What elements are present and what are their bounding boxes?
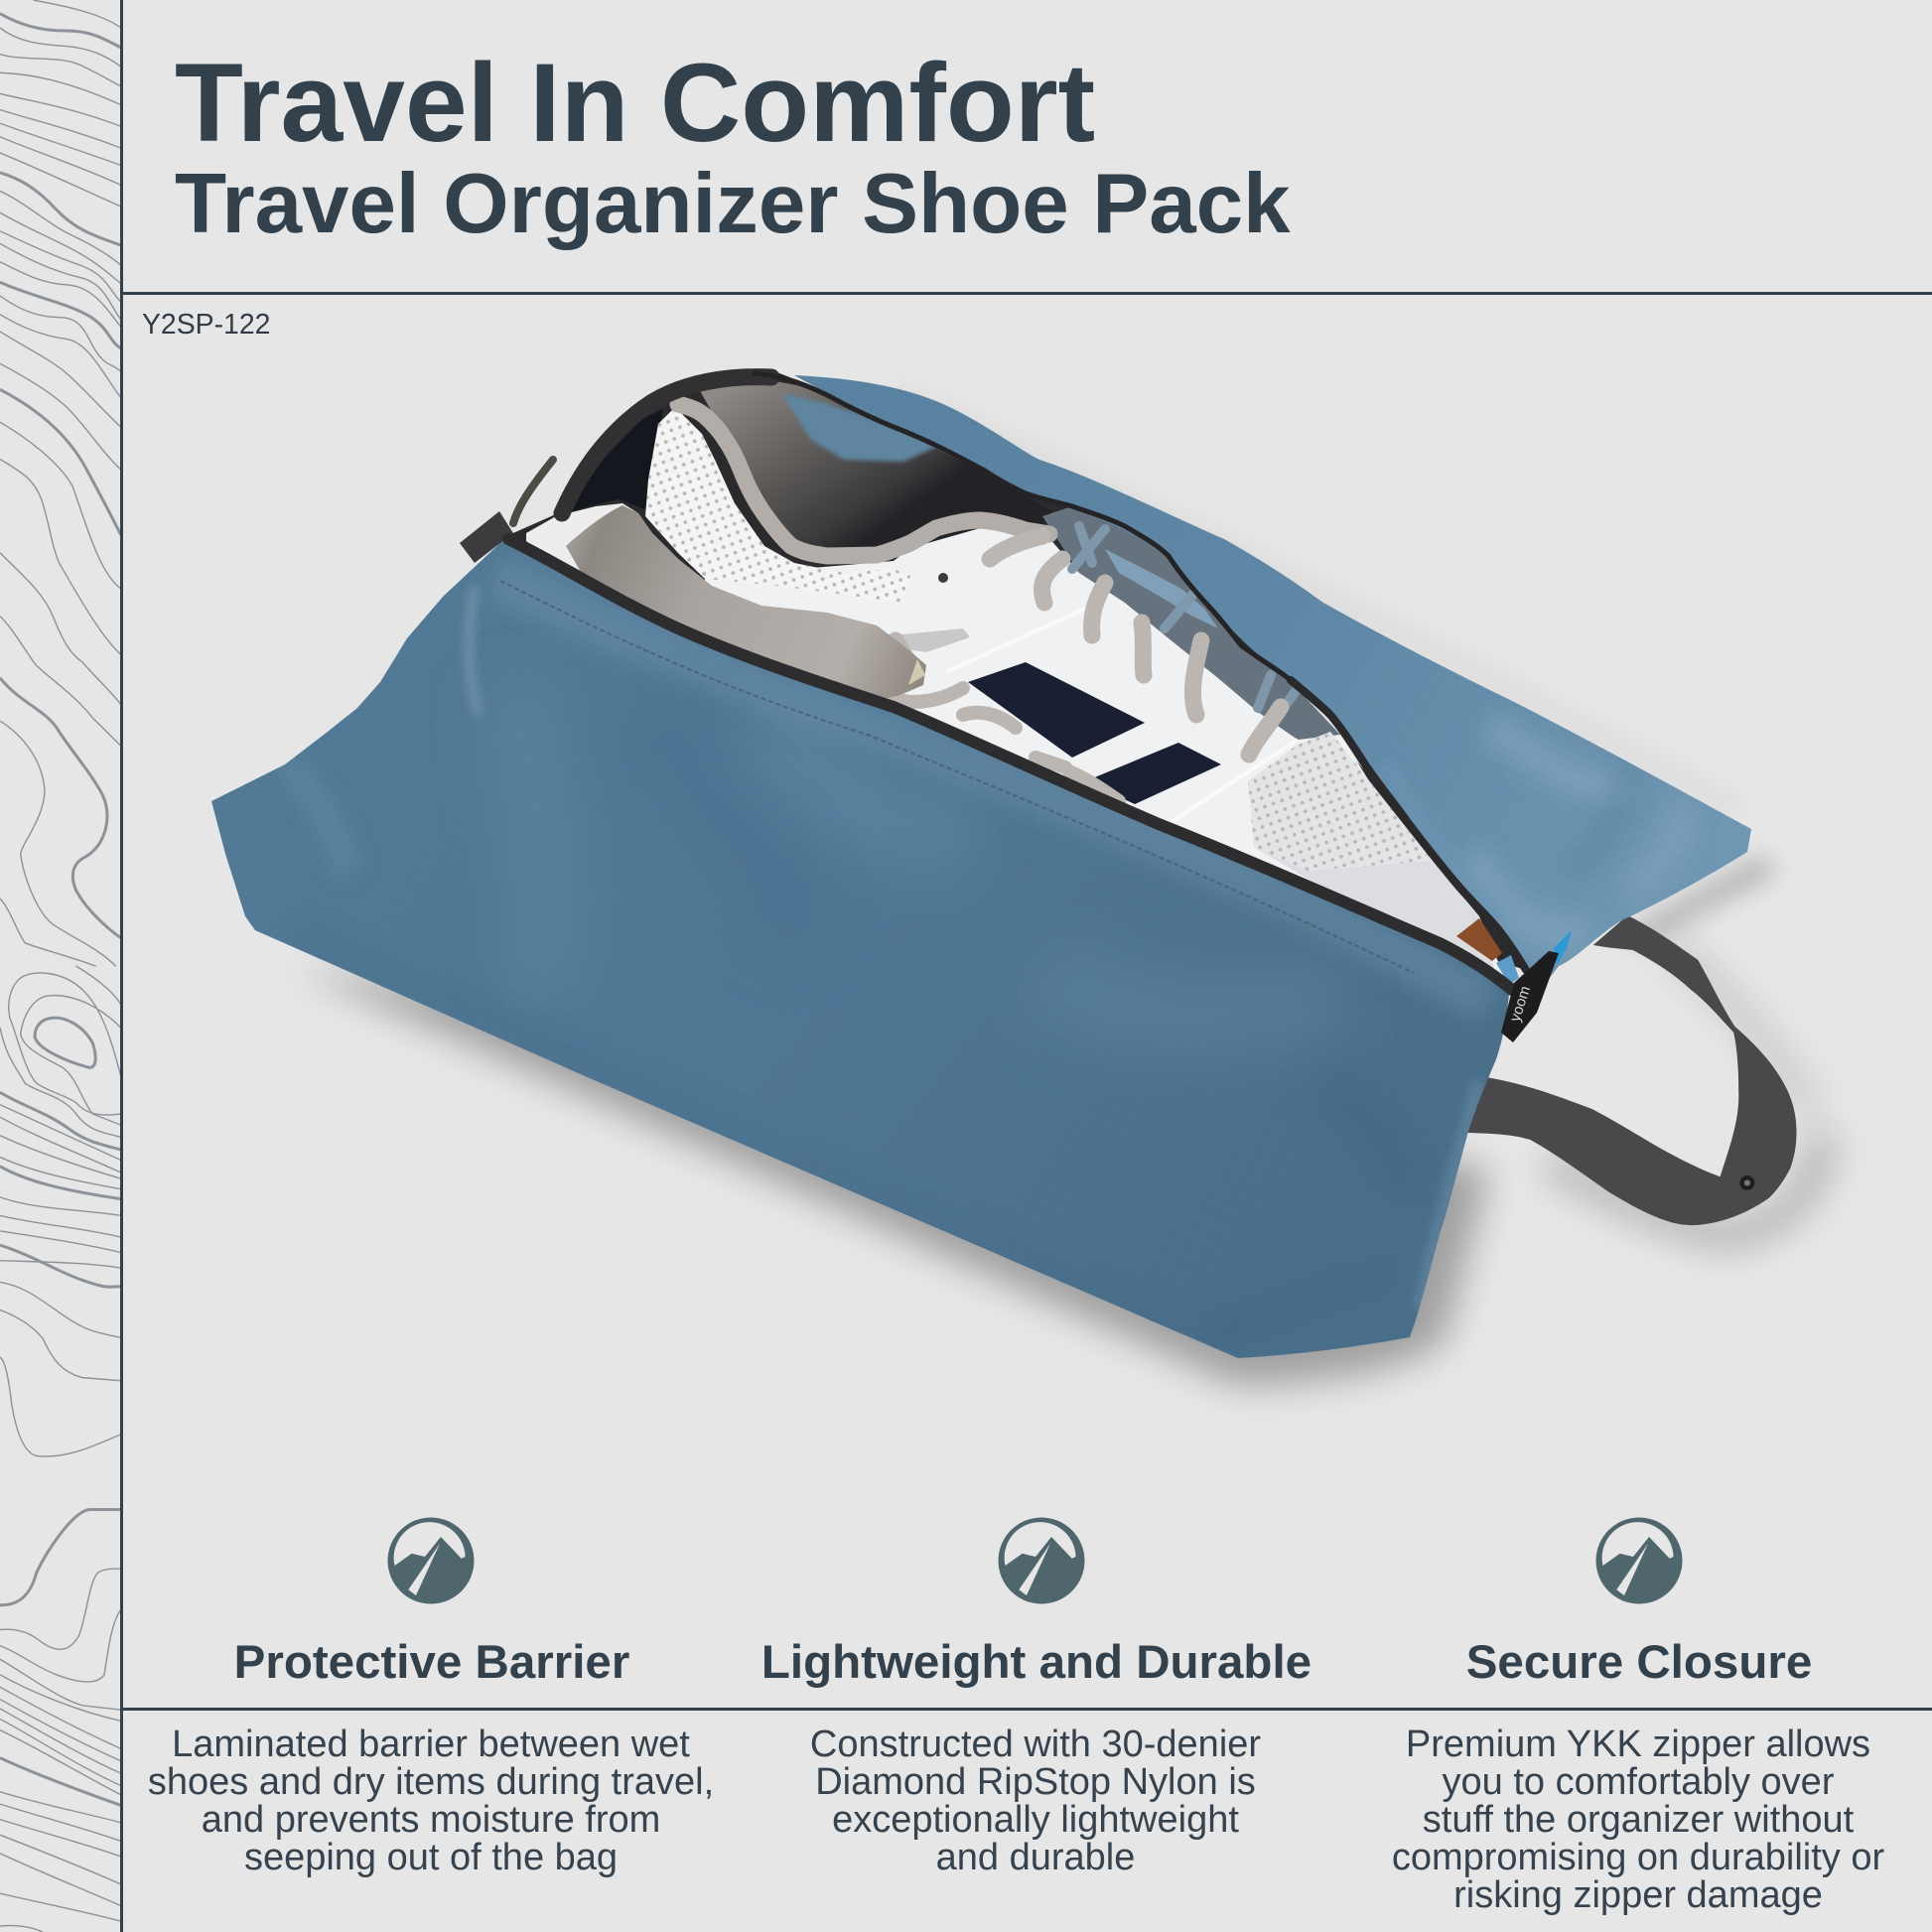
front panel of bag xyxy=(199,526,1529,1370)
front shoe insole fold xyxy=(526,503,926,701)
description: stuff the organizer without xyxy=(1423,1799,1855,1841)
bag shadow xyxy=(298,392,1822,1385)
carry handle strap xyxy=(1460,915,1797,1225)
description: exceptionally lightweight xyxy=(832,1799,1239,1841)
icon: mountain badge xyxy=(999,1517,1084,1604)
brand tag and blue pull xyxy=(1501,930,1572,1042)
description: Constructed with 30-denier xyxy=(810,1724,1261,1765)
heading: Lightweight and Durable xyxy=(761,1636,1311,1689)
sneaker upper and toe xyxy=(705,528,1519,988)
sneaker heel mesh and collar xyxy=(645,404,1049,603)
description: and prevents moisture from xyxy=(202,1799,660,1841)
title: Travel In Comfort xyxy=(175,40,1095,165)
description: shoes and dry items during travel, xyxy=(148,1761,714,1803)
main zipper xyxy=(508,539,1512,990)
description: Diamond RipStop Nylon is xyxy=(815,1761,1256,1803)
description: Laminated barrier between wet xyxy=(172,1724,690,1765)
open bag interior xyxy=(506,370,1526,970)
feature 3: secure closure xyxy=(1392,1517,1885,1916)
heading: Protective Barrier xyxy=(234,1636,629,1689)
description: seeping out of the bag xyxy=(244,1837,618,1878)
brand tag and blue pull: yoom xyxy=(1507,984,1534,1024)
feature 2: lightweight and durable xyxy=(761,1517,1311,1878)
description: compromising on durability or xyxy=(1392,1837,1885,1878)
zipper pull tab xyxy=(460,460,553,563)
subtitle: Travel Organizer Shoe Pack xyxy=(175,157,1291,251)
sneaker laces xyxy=(894,526,1298,801)
upper zipper xyxy=(562,373,1526,970)
description: Premium YKK zipper allows xyxy=(1406,1724,1870,1765)
icon: mountain badge xyxy=(1596,1517,1682,1604)
description: and durable xyxy=(936,1837,1135,1878)
description: you to comfortably over xyxy=(1443,1761,1835,1803)
icon: mountain badge xyxy=(387,1517,475,1604)
topographic contour band xyxy=(0,0,120,1932)
heading: Secure Closure xyxy=(1466,1636,1812,1689)
product photo: shoe pack with shoe inside xyxy=(211,368,1849,1405)
back panel of bag xyxy=(774,357,1767,993)
product code: Y2SP-122 xyxy=(142,309,270,341)
sneaker navy stripes xyxy=(968,662,1221,804)
description: risking zipper damage xyxy=(1453,1874,1823,1916)
feature 1: protective barrier xyxy=(148,1517,714,1878)
